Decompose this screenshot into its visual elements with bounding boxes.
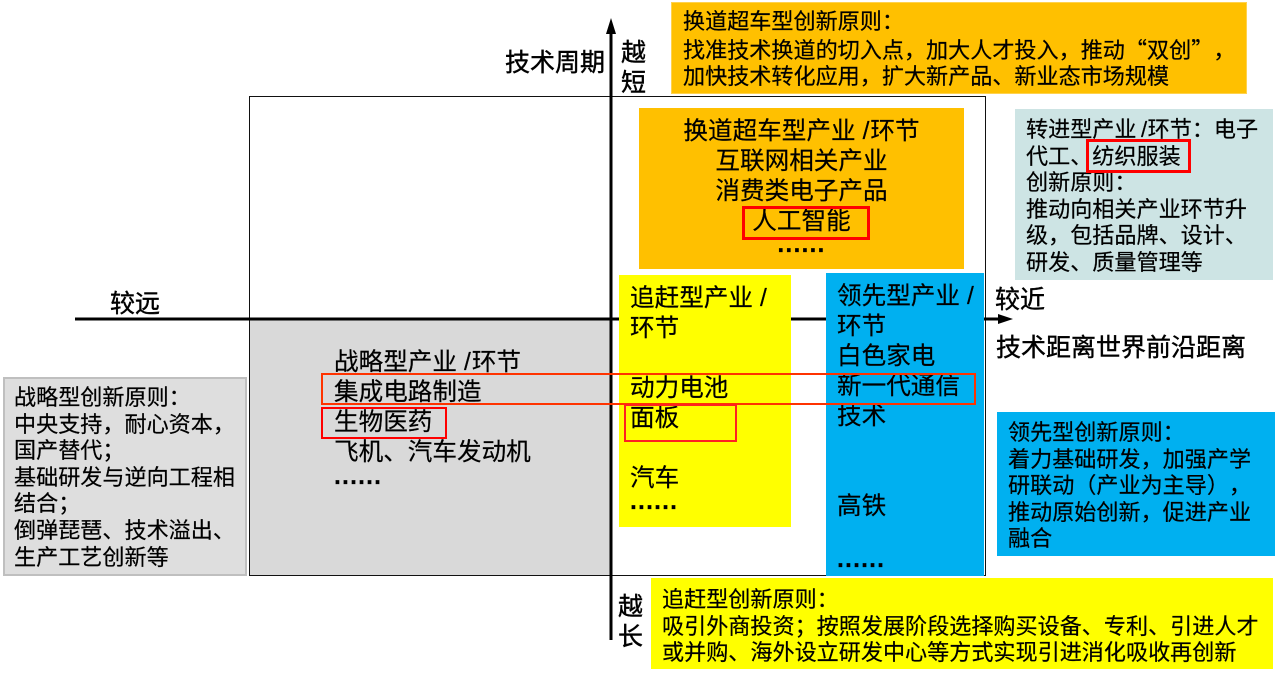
text: leading industries: 领先型产业 / xyxy=(837,283,974,310)
text: strategic principle: 基础研发与逆向工程相 xyxy=(14,465,235,490)
text: leading industries: ...... xyxy=(837,546,885,572)
text: strategic industries: ...... xyxy=(334,463,382,490)
label: farther: 较远 xyxy=(110,290,160,318)
text: strategic industries xyxy=(334,349,531,490)
text: leapfrog industries: 互联网相关产业 xyxy=(715,148,888,175)
text: transition type xyxy=(1026,117,1258,275)
text: strategic principle: 国产替代； xyxy=(14,438,124,463)
label: longer: 越 xyxy=(618,593,643,621)
text: transition type: 创新原则： xyxy=(1026,170,1136,195)
text: leading principle: 着力基础研发，加强产学 xyxy=(1008,447,1251,472)
text: catch-up industries: ...... xyxy=(630,488,678,514)
highlight: integrated circuit row xyxy=(321,373,976,405)
panel: leading principle xyxy=(997,412,1275,556)
panel: strategic quadrant xyxy=(250,319,611,575)
panel: quadrant frame xyxy=(249,96,986,576)
text: strategic industries: 集成电路制造 xyxy=(334,379,482,406)
axis: horizontal xyxy=(75,314,1013,324)
highlight: panel display xyxy=(624,404,737,442)
text: strategic principle: 结合； xyxy=(14,491,80,516)
text: leapfrog industries: ...... xyxy=(777,230,826,258)
text: catch-up industries: 动力电池 xyxy=(630,375,728,402)
text: leapfrog industries xyxy=(683,118,920,258)
text: leapfrog principle: 找准技术换道的切入点，加大人才投入，推动“双创”， xyxy=(683,33,1235,65)
text: transition type: 研发、质量管理等 xyxy=(1026,250,1203,275)
text: catch-up principle xyxy=(662,587,1259,665)
highlight: biomedicine xyxy=(321,407,447,439)
text: transition type: 转进型产业/环节：电子 xyxy=(1026,117,1258,142)
text: transition type: 级，包括品牌、设计、 xyxy=(1026,223,1247,248)
text: strategic industries: 飞机、汽车发动机 xyxy=(334,439,531,466)
text: catch-up principle: 追赶型创新原则： xyxy=(662,587,839,612)
text: strategic principle: 生产工艺创新等 xyxy=(14,545,169,570)
text: strategic principle: 中央支持，耐心资本， xyxy=(14,412,235,437)
text: leading industries: 新一代通信 xyxy=(837,373,960,400)
highlight: textile xyxy=(1086,139,1191,173)
label: distance from frontier: 技术距离世界前沿距离 xyxy=(996,334,1246,362)
text: catch-up industries: 环节 xyxy=(630,315,679,342)
text: transition type: 推动向相关产业环节升 xyxy=(1026,197,1247,222)
panel: leapfrog industries xyxy=(639,108,964,269)
text: leading principle: 研联动（产业为主导）， xyxy=(1008,473,1251,498)
text: leapfrog industries: 换道超车型产业 /环节 xyxy=(683,118,920,145)
text: strategic principle xyxy=(14,385,235,570)
text: leapfrog industries: 人工智能 xyxy=(752,208,851,235)
text: strategic industries: 战略型产业 /环节 xyxy=(334,349,521,376)
panel: transition type xyxy=(1015,109,1273,280)
label: longer: 长 xyxy=(618,623,643,651)
text: leading industries: 环节 xyxy=(837,313,886,340)
text: leapfrog principle xyxy=(683,9,1235,89)
text: strategic principle: 倒弹琵琶、技术溢出、 xyxy=(14,518,235,543)
label: shorter: 越 xyxy=(621,39,646,67)
label: shorter: 短 xyxy=(621,69,646,97)
panel: leapfrog principle xyxy=(671,2,1247,94)
panel: strategic principle xyxy=(3,377,247,576)
text: catch-up industries: 汽车 xyxy=(630,465,679,492)
text: catch-up principle: 吸引外商投资；按照发展阶段选择购买设备、专利、引进人才 xyxy=(662,614,1259,639)
text: transition type: 代工、纺织服装 xyxy=(1026,144,1181,169)
axis: vertical xyxy=(606,18,616,640)
text: strategic industries: 生物医药 xyxy=(334,409,432,436)
text: leading industries: 技术 xyxy=(837,403,886,430)
text: leapfrog principle: 加快技术转化应用，扩大新产品、新业态市场规模 xyxy=(683,64,1169,89)
panel: catch-up industries xyxy=(619,275,791,527)
text: leading principle xyxy=(1008,420,1251,551)
text: leapfrog industries: 消费类电子产品 xyxy=(715,178,888,205)
text: catch-up industries: 追赶型产业 / xyxy=(630,285,767,312)
text: catch-up industries xyxy=(630,285,767,514)
text: strategic principle: 战略型创新原则： xyxy=(14,385,191,410)
text: leading principle: 领先型创新原则： xyxy=(1008,420,1185,445)
label: nearer: 较近 xyxy=(995,286,1045,314)
text: leading industries: 高铁 xyxy=(837,493,886,520)
text: leading principle: 推动原始创新，促进产业 xyxy=(1008,500,1251,525)
text: leading principle: 融合 xyxy=(1008,526,1052,551)
highlight: AI xyxy=(742,206,870,240)
panel: catch-up principle xyxy=(651,578,1273,669)
text: catch-up principle: 或并购、海外设立研发中心等方式实现引进消化吸收再创新 xyxy=(662,640,1236,665)
label: technology cycle: 技术周期 xyxy=(505,49,605,77)
label: shorter xyxy=(621,39,646,97)
text: leading industries: 白色家电 xyxy=(837,343,935,370)
panel: leading industries xyxy=(826,273,984,576)
text: catch-up industries: 面板 xyxy=(630,405,679,432)
text: leapfrog principle: 换道超车型创新原则： xyxy=(683,9,904,34)
text: leading industries xyxy=(837,283,974,572)
label: longer xyxy=(618,593,643,651)
